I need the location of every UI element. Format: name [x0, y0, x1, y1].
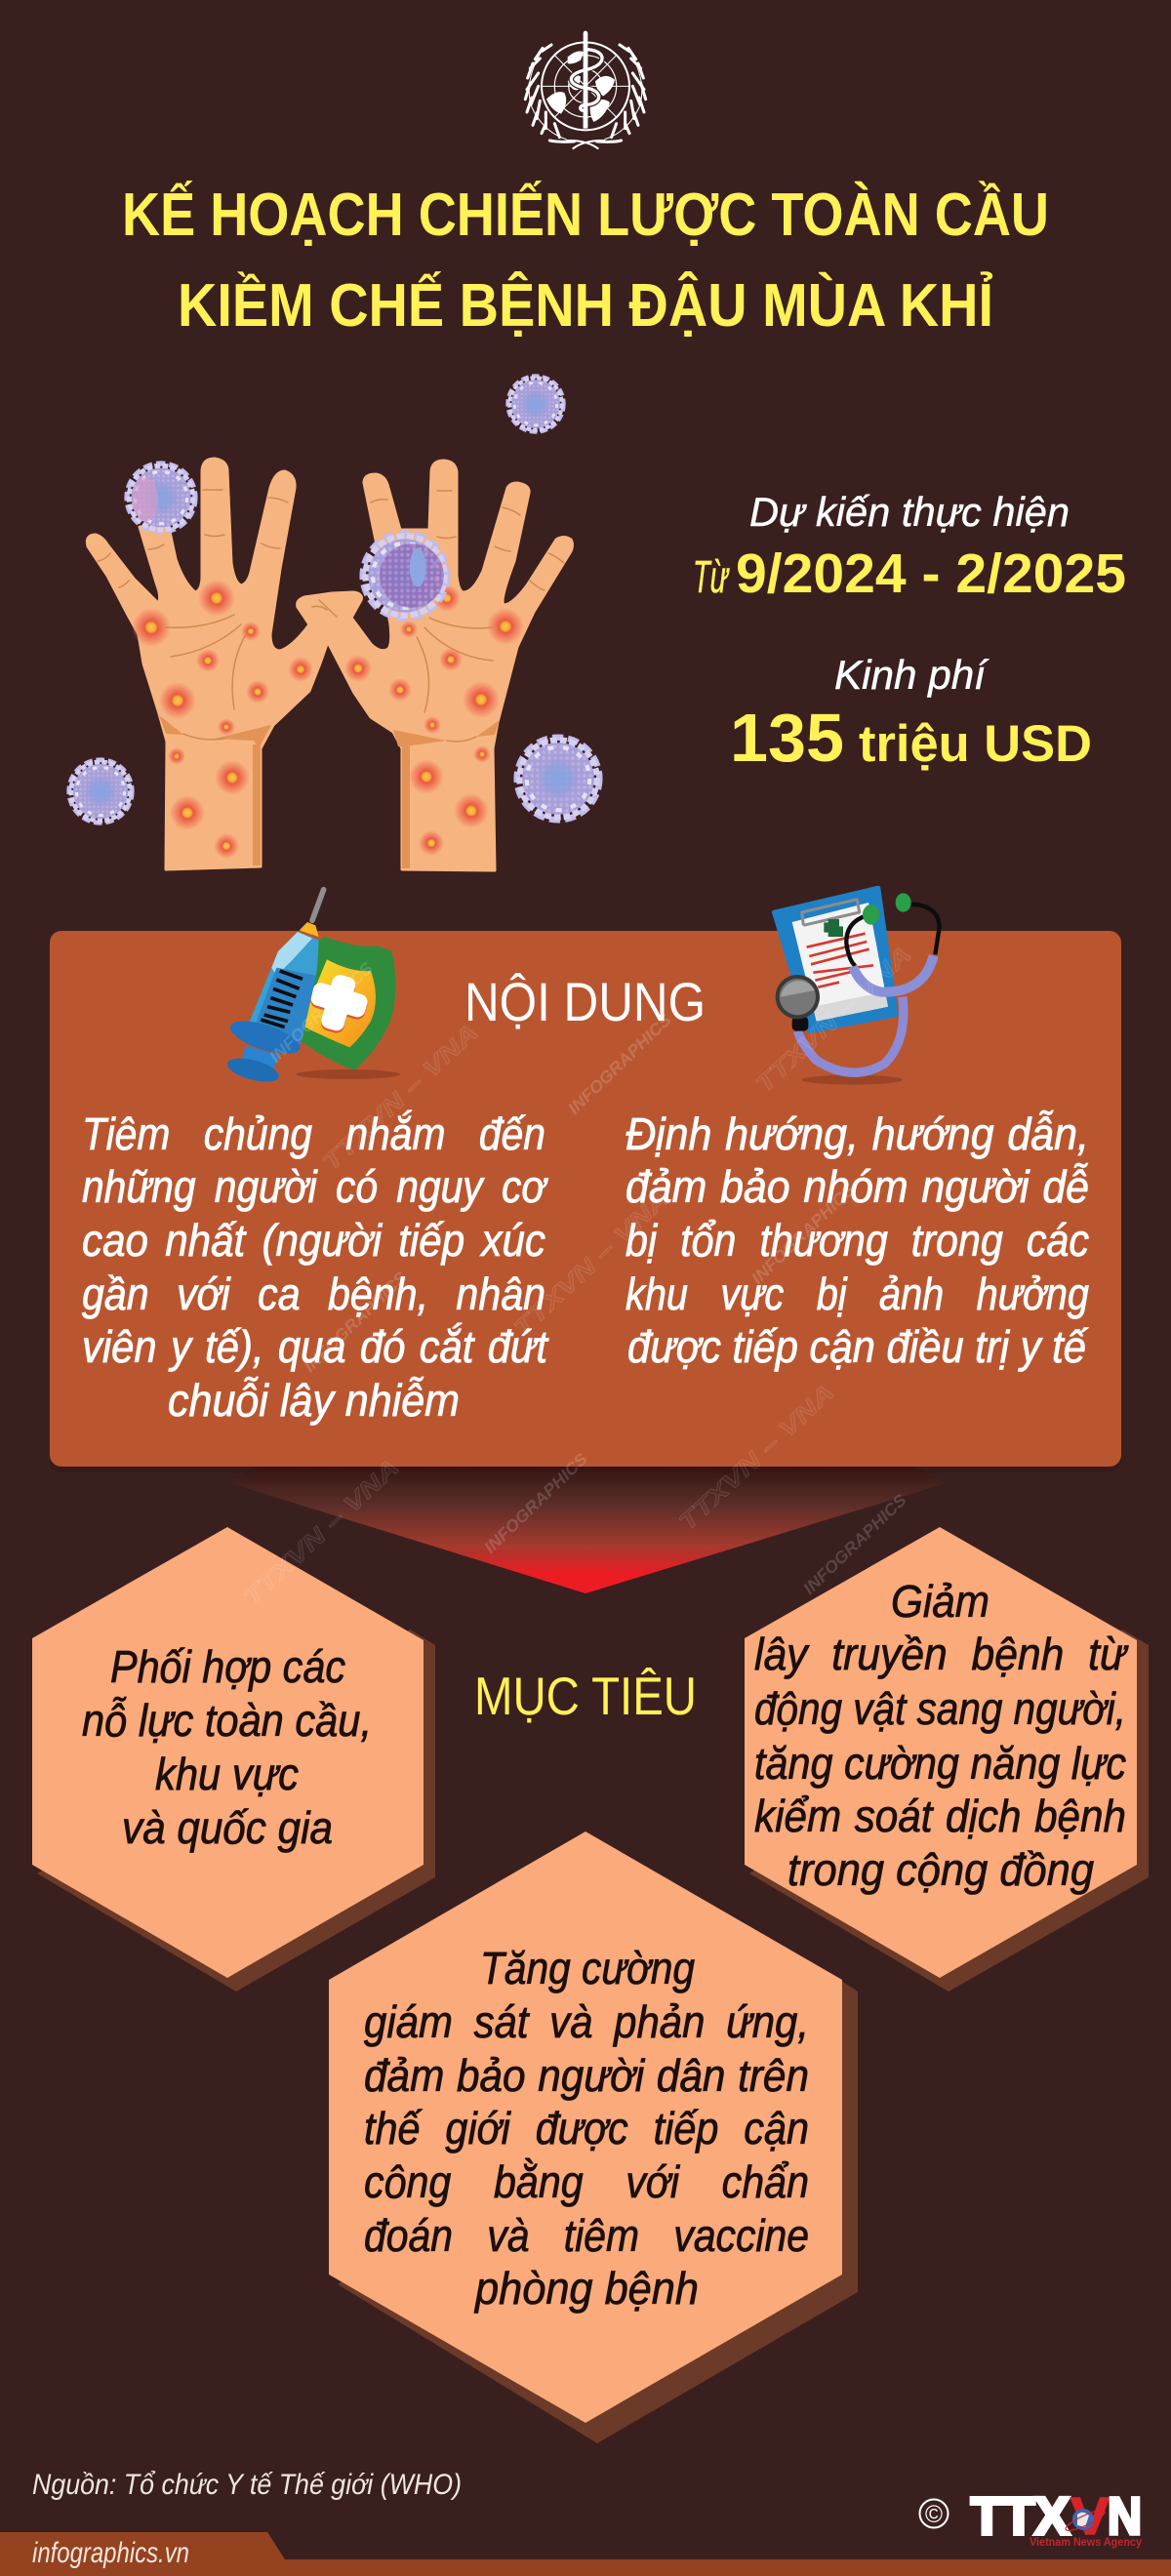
heading: objectives: MỤC TIÊU	[474, 1666, 697, 1726]
footer band	[0, 2532, 1171, 2576]
hexagon text	[364, 1943, 809, 2314]
title	[122, 181, 1049, 340]
watermarks: TTXVN – VNA	[751, 941, 916, 1098]
icon: virus upper left	[127, 463, 195, 532]
content column right: Định hướng, hướng dẫn,	[626, 1108, 1089, 1159]
logo: TTXVN: TTX	[971, 2487, 1070, 2546]
watermarks: INFOGRAPHICS	[266, 958, 377, 1067]
title: KIỀM CHẾ BỆNH ĐẬU MÙA KHỈ	[178, 272, 993, 340]
hexagon text: đảm bảo người dân trên	[364, 2050, 809, 2101]
content column right: khu vực bị ảnh hưởng	[626, 1268, 1089, 1319]
hexagon text: đoán và tiêm vaccine	[364, 2210, 809, 2261]
timing text	[693, 489, 1126, 605]
icon: virus lower right	[517, 738, 599, 820]
content column left: gần với ca bệnh, nhân	[82, 1268, 545, 1319]
website label: infographics.vn	[32, 2537, 189, 2569]
lesions	[132, 580, 524, 859]
hexagon text: phòng bệnh	[473, 2263, 699, 2314]
budget text	[730, 652, 1092, 776]
hexagon text: giám sát và phản ứng,	[364, 1996, 809, 2047]
watermarks: INFOGRAPHICS	[481, 1449, 591, 1557]
logo: TTXVN: N	[1108, 2487, 1142, 2546]
content column right: bị tổn thương trong các	[626, 1215, 1089, 1266]
content column left: cao nhất (người tiếp xúc	[82, 1215, 545, 1266]
hexagon text: khu vực	[155, 1749, 299, 1799]
hexagon: coordination	[32, 1527, 435, 1992]
content column left: những người có nguy cơ	[82, 1161, 548, 1212]
content column right: đảm bảo nhóm người dễ	[626, 1161, 1089, 1212]
logo: TTXVN	[919, 2487, 1142, 2549]
funnel glow	[230, 1467, 947, 1593]
hexagon text: trong cộng đồng	[787, 1844, 1094, 1895]
budget text: Kinh phí	[834, 652, 989, 698]
icon: virus centre	[363, 534, 447, 618]
card heading: NỘI DUNG	[464, 971, 706, 1032]
wrist shading	[159, 715, 500, 868]
hexagon text: lây truyền bệnh từ	[754, 1629, 1129, 1679]
watermarks	[239, 941, 916, 1611]
budget text: 135	[730, 700, 844, 776]
title: KẾ HOẠCH CHIẾN LƯỢC TOÀN CẦU	[122, 181, 1049, 249]
hexagon text: nỗ lực toàn cầu,	[82, 1695, 372, 1746]
logo: TTXVN: ©	[925, 2501, 944, 2528]
icon: syringe and shield	[224, 890, 400, 1086]
hexagon text: tăng cường năng lực	[754, 1738, 1126, 1789]
hexagon text: và quốc gia	[122, 1802, 333, 1853]
source note: Nguồn: Tổ chức Y tế Thế giới (WHO)	[32, 2469, 462, 2501]
watermarks: TTXVN – VNA	[509, 1185, 674, 1342]
watermarks: INFOGRAPHICS	[565, 1010, 675, 1118]
content column left	[82, 1108, 549, 1426]
content column left: viên y tế), qua đó cắt đứt	[82, 1321, 549, 1372]
watermarks: INFOGRAPHICS	[800, 1490, 910, 1598]
skin creases	[98, 490, 564, 742]
watermarks: TTXVN – VNA	[318, 1019, 483, 1176]
content column left: chuỗi lây nhiễm	[168, 1375, 460, 1426]
budget text: triệu USD	[859, 715, 1092, 773]
hexagon: surveillance	[329, 1831, 858, 2443]
hexagon text: thế giới được tiếp cận	[364, 2103, 809, 2153]
watermarks: TTXVN – VNA	[674, 1379, 839, 1536]
timing text: Dự kiến thực hiện	[749, 489, 1070, 535]
icon: virus top	[507, 376, 564, 432]
watermarks: INFOGRAPHICS	[748, 1180, 859, 1288]
illustration: hands with lesions	[87, 459, 572, 870]
timing text: Từ	[693, 551, 730, 602]
watermarks: INFOGRAPHICS	[301, 1268, 411, 1376]
hexagon text: Phối hợp các	[110, 1641, 345, 1692]
timing text: 9/2024 - 2/2025	[736, 543, 1126, 605]
hexagon text: kiểm soát dịch bệnh	[754, 1791, 1126, 1841]
content column right: được tiếp cận điều trị y tế	[627, 1321, 1089, 1372]
logo: TTXVN: V	[1070, 2487, 1110, 2546]
hexagon text	[754, 1576, 1129, 1895]
icon: virus lower left	[69, 760, 132, 823]
content column left: Tiêm chủng nhắm đến	[82, 1108, 545, 1159]
hexagon text: Tăng cường	[480, 1943, 695, 1993]
logo: TTXVN: Vietnam News Agency	[1030, 2535, 1142, 2549]
hexagon text	[82, 1641, 372, 1853]
panel: content card	[50, 931, 1121, 1472]
watermarks: TTXVN – VNA	[239, 1454, 404, 1611]
hexagon text: động vật sang người,	[754, 1683, 1126, 1734]
icon: clipboard and stethoscope	[774, 888, 940, 1085]
logo: WHO emblem	[525, 31, 646, 149]
hand shapes	[87, 459, 572, 870]
hexagon: reduce transmission	[745, 1527, 1149, 1992]
content column right	[626, 1108, 1089, 1372]
hexagon text: Giảm	[891, 1576, 989, 1627]
hexagon text: công bằng với chẩn	[364, 2156, 809, 2207]
